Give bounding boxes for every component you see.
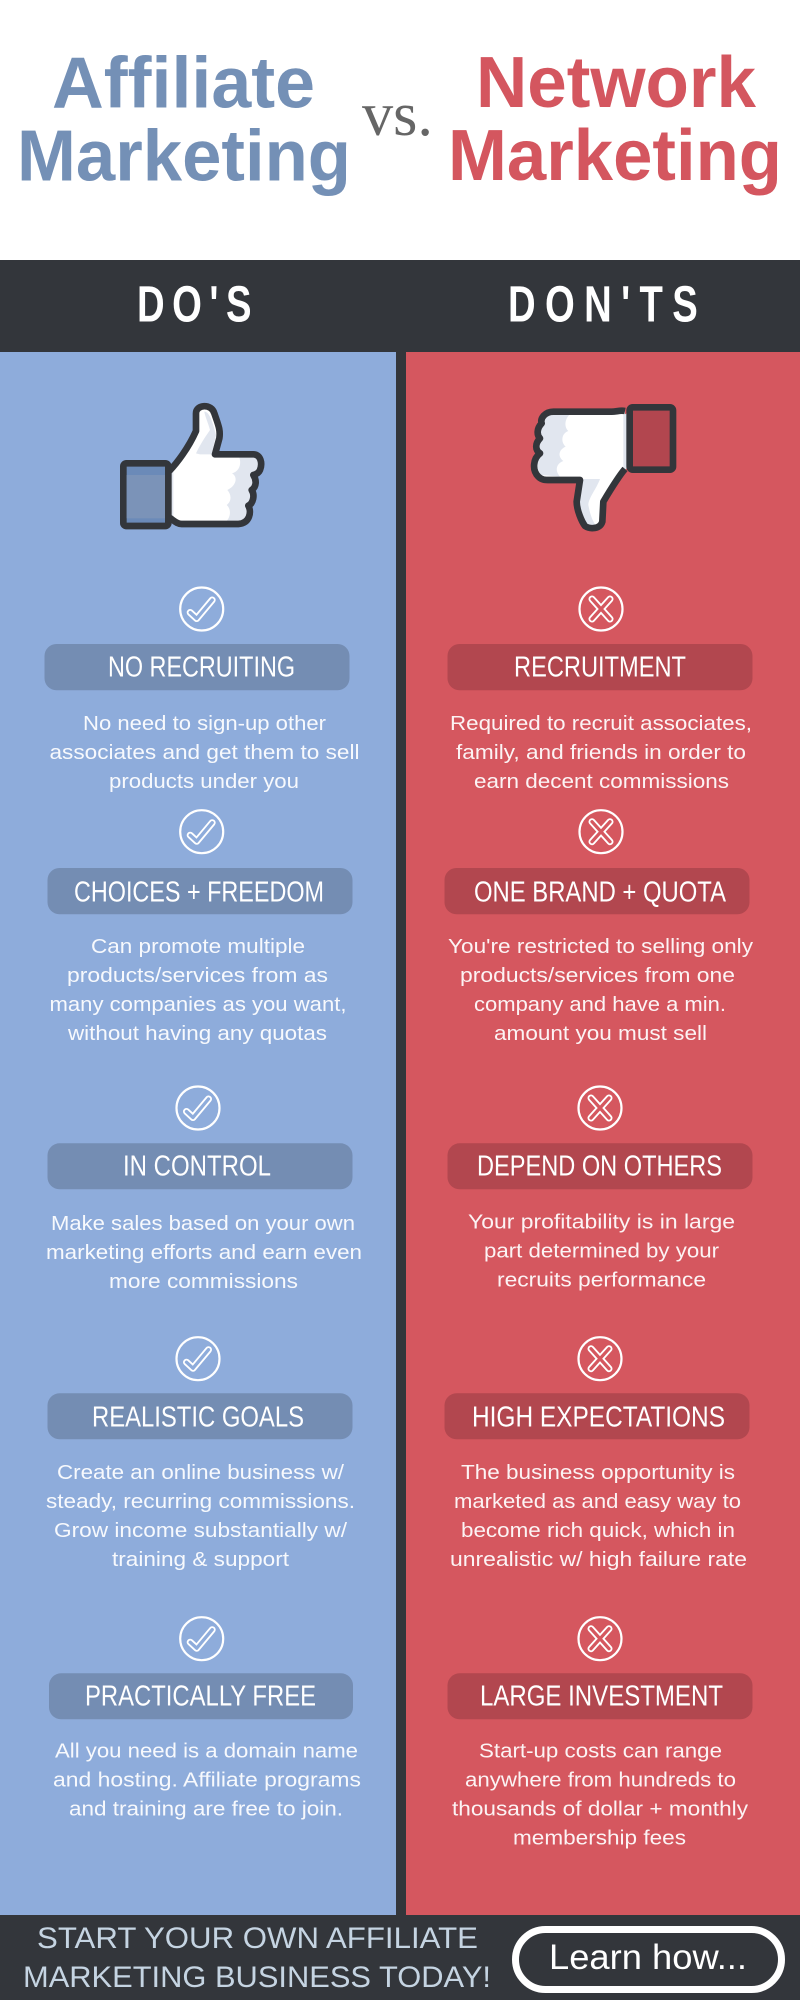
label: recruitment (448, 644, 752, 690)
title: Network Marketing: Marketing (448, 116, 782, 196)
label: recruitment: RECRUITMENT (514, 652, 686, 684)
panel: white title background (0, 0, 800, 260)
title: Affiliate Marketing: Affiliate (52, 44, 315, 124)
heading: DON'TS: DON'TS (508, 275, 707, 333)
text: choices body: Can promote multiple (91, 935, 305, 958)
text: no recruiting body: associates and get them to sell (50, 741, 360, 764)
text: recruitment body: Required to recruit associates, (450, 712, 752, 735)
text: realistic goals body: Grow income substantially w/ (54, 1519, 347, 1542)
title: vs.: vs. (362, 81, 433, 149)
text: call to action: MARKETING BUSINESS TODAY! (23, 1961, 491, 1994)
title: Affiliate Marketing: Marketing (17, 117, 351, 197)
text: depend body: Your profitability is in large (468, 1211, 735, 1234)
text: choices body: products/services from as (67, 964, 328, 987)
text: practically free body: and hosting. Affiliate programs (53, 1769, 361, 1792)
text: recruitment body: earn decent commissions (474, 770, 729, 793)
text: recruitment body: family, and friends in order to (456, 741, 746, 764)
title: Affiliate Marketing (17, 44, 351, 197)
title: Network Marketing: Network (476, 43, 757, 123)
label: choices + freedom (48, 868, 352, 914)
button: learn how (516, 1930, 782, 1990)
icon: check 2 (180, 810, 223, 853)
label: one brand + quota (444, 868, 750, 914)
text: realistic goals body (46, 1461, 355, 1571)
text: in control body: Make sales based on your own (51, 1212, 355, 1235)
label: choices + freedom: CHOICES + FREEDOM (74, 877, 324, 909)
label: realistic goals: REALISTIC GOALS (92, 1401, 304, 1433)
panel: do's column (0, 352, 396, 1915)
text: one brand body: You're restricted to selling only (448, 935, 754, 958)
text: large investment body (452, 1740, 749, 1850)
label: practically free (49, 1673, 353, 1719)
text: high expectations body: become rich quick, which in (461, 1519, 735, 1542)
text: depend body: part determined by your (484, 1240, 719, 1263)
text: in control body (46, 1212, 362, 1293)
icon: cross 4 (578, 1337, 622, 1380)
text: call to action (23, 1922, 491, 1994)
icon: check 4 (176, 1337, 220, 1380)
text: practically free body (53, 1740, 361, 1821)
heading: DO'S: DO'S (137, 275, 259, 333)
text: one brand body (448, 935, 754, 1045)
label: high expectations (444, 1393, 750, 1439)
text: high expectations body (450, 1461, 747, 1571)
text: choices body: many companies as you want, (50, 993, 346, 1016)
icon: cross 1 (580, 588, 622, 630)
icon: cross 2 (580, 810, 622, 853)
text: realistic goals body: training & support (112, 1548, 289, 1571)
icon: check 1 (180, 588, 223, 630)
text: high expectations body: marketed as and easy way to (454, 1490, 741, 1513)
text: large investment body: membership fees (513, 1827, 686, 1850)
label: high expectations: HIGH EXPECTATIONS (472, 1401, 725, 1433)
label: practically free: PRACTICALLY FREE (85, 1681, 316, 1713)
text: no recruiting body: No need to sign-up other (83, 712, 326, 735)
text: high expectations body: The business opportunity is (461, 1461, 735, 1484)
text: in control body: marketing efforts and earn even (46, 1241, 362, 1264)
text: practically free body: and training are free to join. (69, 1798, 343, 1821)
text: practically free body: All you need is a domain name (55, 1740, 358, 1763)
icon: thumbs down (534, 407, 673, 528)
text: choices body: without having any quotas (67, 1022, 327, 1045)
text: one brand body: products/services from one (460, 964, 735, 987)
label: in control: IN CONTROL (123, 1151, 271, 1183)
label: in control (48, 1143, 352, 1189)
text: large investment body: thousands of dollar + monthly (452, 1798, 749, 1821)
label: large investment: LARGE INVESTMENT (480, 1681, 723, 1713)
icon: cross 5 (578, 1617, 622, 1660)
text: large investment body: anywhere from hundreds to (465, 1769, 736, 1792)
text: in control body: more commissions (109, 1270, 298, 1293)
text: one brand body: company and have a min. (474, 993, 726, 1016)
text: realistic goals body: Create an online business w/ (57, 1461, 344, 1484)
label: depend on others: DEPEND ON OTHERS (477, 1151, 722, 1183)
text: realistic goals body: steady, recurring commissions. (46, 1490, 355, 1513)
icon: cross 3 (578, 1086, 622, 1130)
label: one brand + quota: ONE BRAND + QUOTA (474, 877, 727, 909)
text: high expectations body: unrealistic w/ high failure rate (450, 1548, 747, 1571)
label: realistic goals (48, 1393, 352, 1439)
title: Network Marketing (448, 43, 782, 196)
text: call to action: START YOUR OWN AFFILIATE (37, 1922, 478, 1955)
icon: check 5 (180, 1617, 223, 1660)
panel: don'ts column (406, 352, 800, 1915)
text: one brand body: amount you must sell (494, 1022, 707, 1045)
text: large investment body: Start-up costs can range (479, 1740, 722, 1763)
text: depend body: recruits performance (497, 1269, 706, 1292)
text: depend body (468, 1211, 735, 1292)
text: no recruiting body: products under you (109, 770, 299, 793)
button: learn how: Learn how... (549, 1937, 747, 1977)
text: no recruiting body (50, 712, 360, 793)
icon: check 3 (176, 1086, 220, 1130)
label: depend on others (448, 1143, 752, 1189)
label: no recruiting (44, 644, 350, 690)
icon: thumbs up (123, 406, 261, 526)
label: large investment (448, 1673, 752, 1719)
text: choices body (50, 935, 346, 1045)
text: recruitment body (450, 712, 752, 793)
label: no recruiting: NO RECRUITING (108, 652, 295, 684)
